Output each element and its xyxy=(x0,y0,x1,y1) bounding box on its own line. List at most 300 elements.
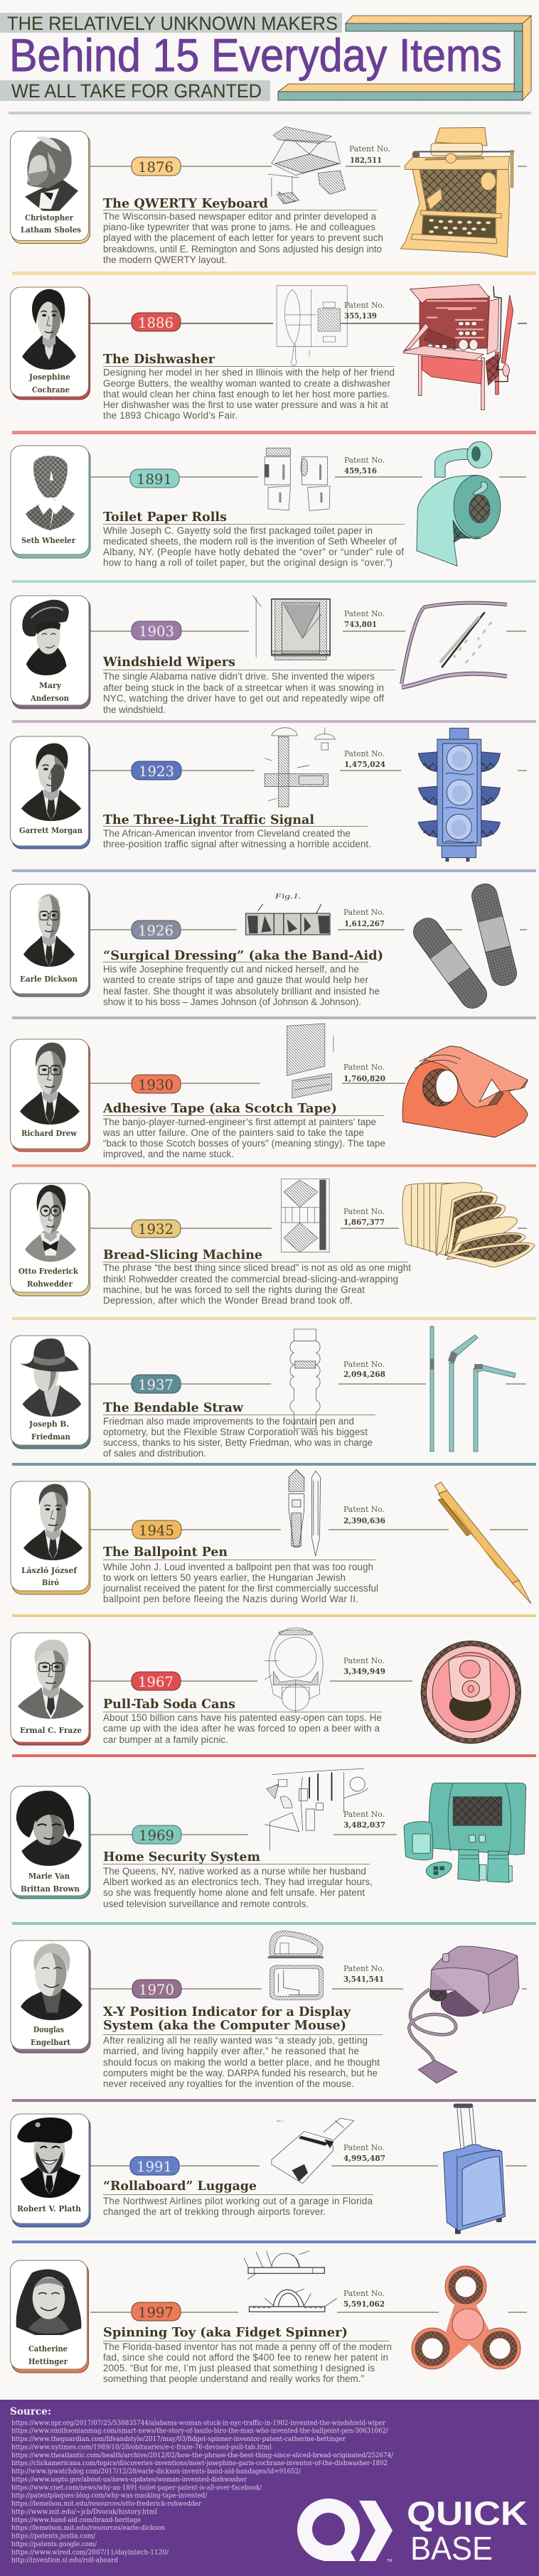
body text: The Wisconsin-based newspaper editor and printer developed a xyxy=(103,211,377,222)
patent drawing xyxy=(290,1329,320,1429)
year badge: 1970 xyxy=(139,1981,174,1998)
heading: “Rollaboard” Luggage xyxy=(103,2179,257,2194)
body text: The single Alabama native didn’t drive. She invented the wipers xyxy=(103,671,375,682)
year badge: 1876 xyxy=(138,159,174,176)
panel: toilet paper rolls xyxy=(11,441,526,568)
source list: https://www.theguardian.com/lifeandstyle/2017/may/03/fidget-spinner-inventor-patent-catherine-hettinger xyxy=(11,2436,346,2443)
panel: adhesive tape xyxy=(10,1024,528,1159)
patent drawing xyxy=(289,1469,321,1556)
inventor name: Latham Sholes xyxy=(21,225,81,235)
inventor card xyxy=(11,1633,90,1745)
heading xyxy=(103,2005,383,2034)
body text: The African-American inventor from Cleveland created the xyxy=(103,828,351,839)
body text: after being stuck in the back of a streetcar when it was snowing in xyxy=(103,682,384,693)
body text: so she was frequently home alone and felt unsafe. Her patent xyxy=(103,1887,365,1898)
patent number: Patent No. xyxy=(343,1206,385,1216)
body text: piano-like typewriter that was prone to jams. He and colleagues xyxy=(103,222,375,232)
body text: came up with the idea after he was forced to open a beer with a xyxy=(103,1723,380,1734)
year badge xyxy=(132,313,181,331)
patent drawing xyxy=(265,448,330,510)
body text: used television surveillance and remote controls. xyxy=(103,1899,309,1909)
timeline xyxy=(90,1988,527,1990)
body text: married, and living happily ever after,” he reasoned that he xyxy=(103,2046,359,2056)
inventor name: Marie Van xyxy=(28,1871,70,1881)
patent number: 1,760,820 xyxy=(343,1073,385,1083)
source list: https://www.uspto.gov/about-us/news-updates/woman-invented-dishwasher xyxy=(11,2476,247,2484)
patent number: Patent No. xyxy=(343,1504,385,1514)
year badge xyxy=(132,1075,181,1093)
patent number: 1,867,377 xyxy=(343,1217,385,1227)
timeline xyxy=(90,630,526,632)
body text: George Butters, the wealthy woman wanted to create a dishwasher xyxy=(103,378,391,389)
body text: computers might be the way. DARPA funded his research, but he xyxy=(103,2068,378,2078)
patent drawing xyxy=(265,727,335,807)
inventor name: Anderson xyxy=(30,693,70,703)
body text: The phrase “the best thing since sliced bread” is not as old as one might xyxy=(103,1262,411,1273)
product: fidget spinner xyxy=(412,2266,521,2369)
portrait: Garrett Morgan xyxy=(21,744,81,821)
patent number: Patent No. xyxy=(344,608,385,618)
inventor card xyxy=(11,2114,90,2227)
body text xyxy=(102,1562,378,1604)
body text: The Northwest Airlines pilot working out of a garage in Florida xyxy=(103,2196,373,2206)
body text: the windshield. xyxy=(103,704,166,715)
timeline xyxy=(90,1083,405,1084)
product: rolling luggage xyxy=(444,2104,506,2233)
subtitle bottom: WE ALL TAKE FOR GRANTED xyxy=(11,80,262,102)
year badge xyxy=(132,1520,181,1539)
patent drawing xyxy=(252,595,330,660)
patent number: Patent No. xyxy=(343,1809,385,1819)
product: dishwasher xyxy=(403,284,513,410)
inventor card xyxy=(10,2260,88,2373)
body text: Albany, NY. (People have hotly debated the “over” or “under” rule of xyxy=(103,547,404,557)
patent number xyxy=(343,1963,385,1984)
inventor card xyxy=(11,1786,90,1899)
body text: optometry, but the Flexible Straw Corporation was his biggest xyxy=(103,1427,368,1437)
year badge xyxy=(132,1672,181,1690)
body text: three-position traffic signal after witnessing a horrible accident. xyxy=(103,839,371,849)
body text: think! Rohwedder created the commercial bread-slicing-and-wrapping xyxy=(103,1274,398,1284)
logo: Quick Base xyxy=(297,2494,528,2567)
year badge: 1969 xyxy=(139,1827,174,1844)
body text: wanted to create strips of tape and gauze that would help her xyxy=(102,975,369,985)
inventor name: Engelbart xyxy=(31,2037,71,2047)
patent drawing xyxy=(281,1179,329,1252)
inventor card xyxy=(11,596,90,709)
body text xyxy=(103,1866,373,1909)
patent drawing xyxy=(272,2118,354,2184)
inventor name: Cochrane xyxy=(32,385,70,395)
body text: “back to those Scotch bosses of yours” (meaning stingy). The tape xyxy=(103,1138,385,1149)
timeline xyxy=(90,1680,412,1682)
panel: pull-tab soda cans xyxy=(11,1628,521,1745)
patent number: Patent No. xyxy=(343,2142,385,2152)
product: computer mouse xyxy=(409,1946,519,2083)
portrait: Seth Wheeler (silhouette) xyxy=(26,456,75,530)
patent drawing xyxy=(287,1024,333,1098)
patent number xyxy=(343,1359,385,1379)
inventor card xyxy=(10,736,90,849)
body text: the 1893 Chicago World’s Fair. xyxy=(103,410,238,421)
timeline xyxy=(90,1383,526,1385)
body text: success, thanks to his sister, Betty Friedman, who was in charge xyxy=(103,1437,373,1448)
body text: The Queens, NY, native worked as a nurse while her husband xyxy=(103,1866,366,1877)
inventor card xyxy=(10,287,90,399)
patent number xyxy=(343,2142,385,2163)
source list: http://patentplaques-blog.com/why-was-masking-tape-invented/ xyxy=(11,2493,208,2500)
inventor name: László József xyxy=(21,1565,78,1575)
patent number: Patent No. xyxy=(343,1062,385,1072)
body text: medicated sheets, the modern roll is the invention of Seth Wheeler of xyxy=(103,536,397,547)
year badge xyxy=(130,469,179,488)
timeline xyxy=(90,770,527,771)
body text xyxy=(103,525,404,568)
body text xyxy=(103,2341,392,2384)
year badge xyxy=(132,2302,181,2321)
portrait: Christopher Latham Sholes xyxy=(25,136,78,211)
inventor name: Douglas xyxy=(33,2024,64,2034)
year badge: 1926 xyxy=(138,922,174,939)
year badge xyxy=(132,621,181,640)
body text: played with the placement of each letter for years to prevent such xyxy=(103,232,383,243)
heading: Spinning Toy (aka Fidget Spinner) xyxy=(103,2325,348,2340)
heading: Toilet Paper Rolls xyxy=(103,510,227,525)
body text: 2005. “But for me, I’m just pleased that something I designed is xyxy=(103,2363,375,2373)
portrait: Catherine Hettinger xyxy=(16,2270,81,2335)
patent number: 2,094,268 xyxy=(343,1369,385,1379)
patent number: 182,511 xyxy=(350,155,382,165)
patent drawing: Fig.1. xyxy=(274,891,301,900)
logo: Quick Base: QUICK xyxy=(407,2494,528,2532)
patent number xyxy=(344,608,385,629)
patent number: Patent No. xyxy=(344,455,385,465)
main title: Behind 15 Everyday Items xyxy=(9,29,502,81)
inventor name: Christopher xyxy=(25,213,74,222)
portrait: Laszlo Jozsef Biro xyxy=(23,1484,82,1560)
product: ballpoint pen xyxy=(435,1482,531,1604)
body text xyxy=(103,367,395,421)
source list: https://clickamericana.com/topics/discoveries-inventions/meet-josephine-garis-cochrane-inventor-of-the-dishwasher-1892 xyxy=(11,2460,388,2467)
inventor name: Catherine xyxy=(28,2344,68,2354)
patent drawing xyxy=(265,1628,323,1713)
source list: https://www.smithsonianmag.com/smart-news/the-story-of-laszlo-biro-the-man-who-invented-the-ballpoint-pen-30631062/ xyxy=(11,2428,389,2435)
body text: something that people understand and really works for them.” xyxy=(103,2373,364,2384)
year badge: 1932 xyxy=(138,1220,174,1238)
year badge xyxy=(132,1825,181,1844)
year badge xyxy=(132,761,181,780)
body text: to work on letters 50 years earlier, the Hungarian Jewish xyxy=(103,1572,346,1583)
panel: bendable straw xyxy=(11,1326,526,1459)
patent number: 3,482,037 xyxy=(343,1820,385,1830)
patent number: Patent No. xyxy=(343,1963,385,1973)
inventor name: Friedman xyxy=(31,1432,71,1442)
inventor name: Richard Drew xyxy=(21,1128,78,1138)
source list: http://www.mit.edu/~jcb/Dvorak/history.html xyxy=(11,2509,157,2516)
body text: Albert worked as an electronics tech. They had irregular hours, xyxy=(103,1877,373,1887)
inventor name: Rohwedder xyxy=(27,1279,73,1289)
body text: The banjo-player-turned-engineer’s first attempt at painters’ tape xyxy=(103,1117,376,1127)
patent drawing xyxy=(268,127,346,204)
patent number xyxy=(343,1206,385,1227)
inventor name: Joseph B. xyxy=(28,1419,69,1429)
body text xyxy=(103,1416,373,1459)
body text: fad, since she could not afford the $400 fee to renew her patent in xyxy=(103,2352,388,2363)
source list: https://www.band-aid.com/brand-heritage xyxy=(11,2517,141,2524)
source list: https://patents.google.com/ xyxy=(11,2541,97,2548)
heading: Home Security System xyxy=(103,1850,260,1864)
body text xyxy=(103,1262,411,1306)
year badge xyxy=(132,1375,181,1393)
year badge: 1930 xyxy=(138,1076,174,1093)
panel: QWERTY keyboard xyxy=(10,127,527,265)
inventor name: Seth Wheeler xyxy=(21,535,76,545)
body text xyxy=(102,1117,385,1159)
patent number: Patent No. xyxy=(343,1359,385,1369)
subtitle band bottom xyxy=(0,80,270,101)
product: traffic light xyxy=(418,728,500,862)
patent number xyxy=(343,2288,385,2309)
body text: His wife Josephine frequently cut and nicked herself, and he xyxy=(103,964,359,975)
source list: https://lemelson.mit.edu/resources/otto-frederick-rohwedder xyxy=(11,2501,202,2508)
panel: ballpoint pen xyxy=(11,1469,531,1604)
body text xyxy=(103,1712,382,1745)
patent number: Patent No. xyxy=(343,2288,385,2298)
inventor name: Mary xyxy=(39,680,61,690)
inventor card xyxy=(11,1481,90,1594)
body text xyxy=(103,2035,380,2089)
heading: Adhesive Tape (aka Scotch Tape) xyxy=(102,1101,337,1116)
patent number: Patent No. xyxy=(343,1655,385,1665)
body text: While John J. Loud invented a ballpoint pen that was too rough xyxy=(103,1562,373,1572)
panel: fidget spinner xyxy=(10,2251,527,2384)
patent number: 2,390,636 xyxy=(343,1515,385,1525)
portrait: Richard Drew xyxy=(20,1043,80,1125)
body text xyxy=(102,964,380,1007)
subtitle band top xyxy=(0,13,342,33)
patent number: 5,591,062 xyxy=(343,2299,385,2309)
icon: decorative bracket frame xyxy=(278,16,531,100)
product: bendable straws xyxy=(430,1326,516,1451)
patent number xyxy=(349,144,390,165)
inventor name: Otto Frederick xyxy=(18,1266,79,1276)
body text: breakdowns, until E. Remington and Sons adjusted his design into xyxy=(103,244,382,254)
patent drawing xyxy=(265,1769,368,1850)
inventor name: Robert V. Plath xyxy=(17,2204,82,2213)
patent drawing xyxy=(268,1931,323,2000)
portrait: Mary Anderson xyxy=(22,600,69,675)
product: home security system xyxy=(404,1783,526,1882)
product: typewriter xyxy=(400,127,514,257)
patent number: 743,801 xyxy=(344,619,377,629)
patent number xyxy=(343,907,385,928)
body text: the modern QWERTY layout. xyxy=(103,254,227,265)
patent drawing xyxy=(246,891,330,935)
source list: https://patents.justia.com/ xyxy=(11,2533,96,2540)
year badge: 1945 xyxy=(139,1522,174,1539)
portrait: Robert V. Plath xyxy=(17,2118,80,2198)
patent number: 3,349,949 xyxy=(343,1666,385,1676)
portrait: Douglas Engelbart xyxy=(21,1943,82,2020)
source list: http://www.ipwatchdog.com/2017/12/28/earle-dickson-invents-band-aid-bandages/id=91652/ xyxy=(11,2469,301,2476)
inventor name: Bíró xyxy=(42,1577,59,1587)
body text: heal faster. She thought it was absolutely brilliant and insisted he xyxy=(103,986,380,997)
timeline xyxy=(90,1834,397,1835)
year badge: 1967 xyxy=(138,1673,174,1690)
body text: While Joseph C. Gayetty sold the first packaged toilet paper in xyxy=(103,525,373,536)
patent number xyxy=(343,1655,385,1676)
year badge xyxy=(132,1980,181,1998)
body text: should focus on making the world a better place, and he thought xyxy=(103,2057,380,2068)
timeline xyxy=(90,476,526,478)
source list xyxy=(11,2420,394,2565)
inventor name: Josephine xyxy=(28,372,70,382)
body text: Designing her model in her shed in Illinois with the help of her friend xyxy=(103,367,395,378)
body text: The Florida-based inventor has not made a penny off of the modern xyxy=(103,2341,392,2352)
patent drawing: FIG. 1 xyxy=(277,2120,284,2122)
timeline xyxy=(90,2165,527,2167)
body text: improved, and the name stuck. xyxy=(103,1149,234,1159)
portrait: Joseph B. Friedman xyxy=(20,1338,81,1417)
body text xyxy=(103,2196,373,2217)
product: toilet paper roll xyxy=(417,441,501,566)
panel: computer mouse xyxy=(11,1931,527,2089)
inventor card xyxy=(10,131,90,243)
body text: Depression, after which the Wonder Bread brand took off. xyxy=(103,1295,353,1306)
panel: windshield wipers xyxy=(11,595,526,715)
product: tape dispenser xyxy=(402,1046,528,1137)
heading: Pull-Tab Soda Cans xyxy=(103,1697,235,1712)
body text: NYC, watching the driver have to get out and repeatedly wipe off xyxy=(103,693,384,704)
heading: Windshield Wipers xyxy=(102,655,235,670)
body text: ballpoint pen before fleeing the Nazis during World War II. xyxy=(103,1594,358,1604)
year badge xyxy=(130,2157,179,2175)
inventor card xyxy=(11,1941,90,2053)
timeline xyxy=(90,323,527,324)
source list: https://www.wired.com/2007/11/dayintech-1120/ xyxy=(11,2549,169,2556)
year badge: 1886 xyxy=(138,314,174,331)
body text: of sales and distribution. xyxy=(103,1448,206,1459)
portrait: Marie Van Brittan Brown xyxy=(16,1791,82,1866)
product: soda can top xyxy=(421,1641,521,1744)
patent number xyxy=(343,1062,385,1083)
patent number xyxy=(344,300,385,321)
heading: The QWERTY Keyboard xyxy=(103,196,268,211)
body text: that would clean her china fast enough to let her host more parties. xyxy=(103,389,390,399)
product: sliced bread xyxy=(402,1183,535,1267)
heading: The Dishwasher xyxy=(103,352,215,367)
year badge: 1937 xyxy=(138,1376,174,1393)
body text: changed the art of trekking through airports forever. xyxy=(103,2206,326,2217)
product: windshield wiper xyxy=(402,603,507,687)
body text xyxy=(103,211,383,265)
patent number: 1,475,024 xyxy=(344,759,385,769)
patent number: 3,541,541 xyxy=(343,1974,384,1984)
body text xyxy=(103,828,371,849)
inventor name: Hettinger xyxy=(28,2356,68,2366)
body text: After realizing all he really wanted was “a steady job, getting xyxy=(103,2035,368,2046)
patent number: Patent No. xyxy=(343,907,385,917)
source list: https://www.npr.org/2017/07/25/538835744/alabama-woman-stuck-in-nyc-traffic-in-1902-invented-the-windshield-wiper xyxy=(11,2420,386,2427)
source list: https://www.nytimes.com/1989/10/28/obituaries/e-c-fraze-76-devised-pull-tab.html xyxy=(11,2444,272,2451)
body text: About 150 billion cans have his patented easy-open can tops. He xyxy=(103,1712,382,1723)
inventor card xyxy=(11,446,90,558)
sources heading: Source: xyxy=(10,2406,51,2417)
year badge: 1903 xyxy=(139,623,174,640)
source list: http://invention.si.edu/roll-aboard xyxy=(11,2558,118,2565)
inventor card xyxy=(11,1336,90,1449)
portrait: Josephine Cochrane xyxy=(22,289,76,370)
body text: show it to his boss – James Johnson (of Johnson & Johnson). xyxy=(103,997,361,1007)
heading: “Surgical Dressing” (aka the Band-Aid) xyxy=(103,948,383,963)
panel: bread-slicing machine xyxy=(10,1179,535,1306)
timeline xyxy=(90,1529,528,1530)
inventor card xyxy=(10,1184,90,1296)
year badge: 1997 xyxy=(138,2304,174,2321)
patent number: 4,995,487 xyxy=(343,2153,385,2163)
body text: Friedman also made improvements to the fountain pen and xyxy=(103,1416,354,1427)
inventor name: Earle Dickson xyxy=(20,974,78,984)
source list: https://www.cnet.com/news/why-an-1891-toilet-paper-patent-is-all-over-facebook/ xyxy=(11,2484,262,2491)
year badge xyxy=(132,921,181,939)
panel: surgical dressing xyxy=(10,881,527,1013)
logo: Quick Base: TM xyxy=(387,2559,392,2563)
panel: home security system xyxy=(11,1769,526,1909)
subtitle top: THE RELATIVELY UNKNOWN MAKERS xyxy=(7,13,338,34)
patent drawing xyxy=(277,286,347,365)
panel: sources footer xyxy=(0,2400,539,2576)
body text: was an utter failure. One of the painters said to take the tape xyxy=(102,1127,364,1138)
body text xyxy=(103,671,384,715)
year badge: 1891 xyxy=(137,471,172,488)
inventor card xyxy=(10,884,90,997)
body text: Her dishwasher was the first to use water pressure and was a hit at xyxy=(103,399,388,410)
inventor name: Garrett Morgan xyxy=(19,825,83,835)
year badge xyxy=(132,157,181,176)
patent number: 459,516 xyxy=(344,466,377,476)
product: adhesive bandages xyxy=(409,881,519,1013)
source list: https://lemelson.mit.edu/resources/earle-dickson xyxy=(11,2525,165,2532)
timeline xyxy=(90,166,527,167)
heading: The Bendable Straw xyxy=(103,1400,243,1415)
body text: machine, but he was forced to sell the rights during the Great xyxy=(103,1284,365,1295)
year badge: 1991 xyxy=(137,2158,172,2175)
inventor card xyxy=(10,1039,90,1152)
heading: Bread-Slicing Machine xyxy=(103,1247,262,1262)
year badge: 1923 xyxy=(139,763,174,780)
patent drawing xyxy=(244,2251,337,2312)
patent number: Patent No. xyxy=(344,300,385,310)
heading: The Three-Light Traffic Signal xyxy=(103,812,314,827)
body text: journalist received the patent for the first commercially successful xyxy=(102,1583,378,1594)
patent number: 1,612,267 xyxy=(344,918,385,928)
portrait: Otto Frederick Rohwedder xyxy=(25,1185,76,1262)
patent number xyxy=(344,455,385,476)
patent number: 355,139 xyxy=(344,311,377,321)
patent number: Patent No. xyxy=(349,144,390,154)
body text: never received any royalties for the invention of the mouse. xyxy=(103,2078,354,2089)
panel: three-light traffic signal xyxy=(10,727,527,862)
source list: https://www.theatlantic.com/health/archive/2012/02/how-the-phrase-the-best-thing-since-sliced-bread-originated/252674/ xyxy=(11,2452,394,2459)
panel: dishwasher xyxy=(10,284,527,421)
heading: System (aka the Computer Mouse) xyxy=(103,2018,346,2033)
panel: rollaboard luggage xyxy=(11,2104,527,2233)
body text: car bumper at a family picnic. xyxy=(103,1734,228,1745)
inventor name: Ermal C. Fraze xyxy=(20,1725,82,1735)
portrait: Ermal C. Fraze xyxy=(18,1640,84,1719)
heading: X-Y Position Indicator for a Display xyxy=(103,2005,351,2019)
patent number xyxy=(344,748,385,769)
